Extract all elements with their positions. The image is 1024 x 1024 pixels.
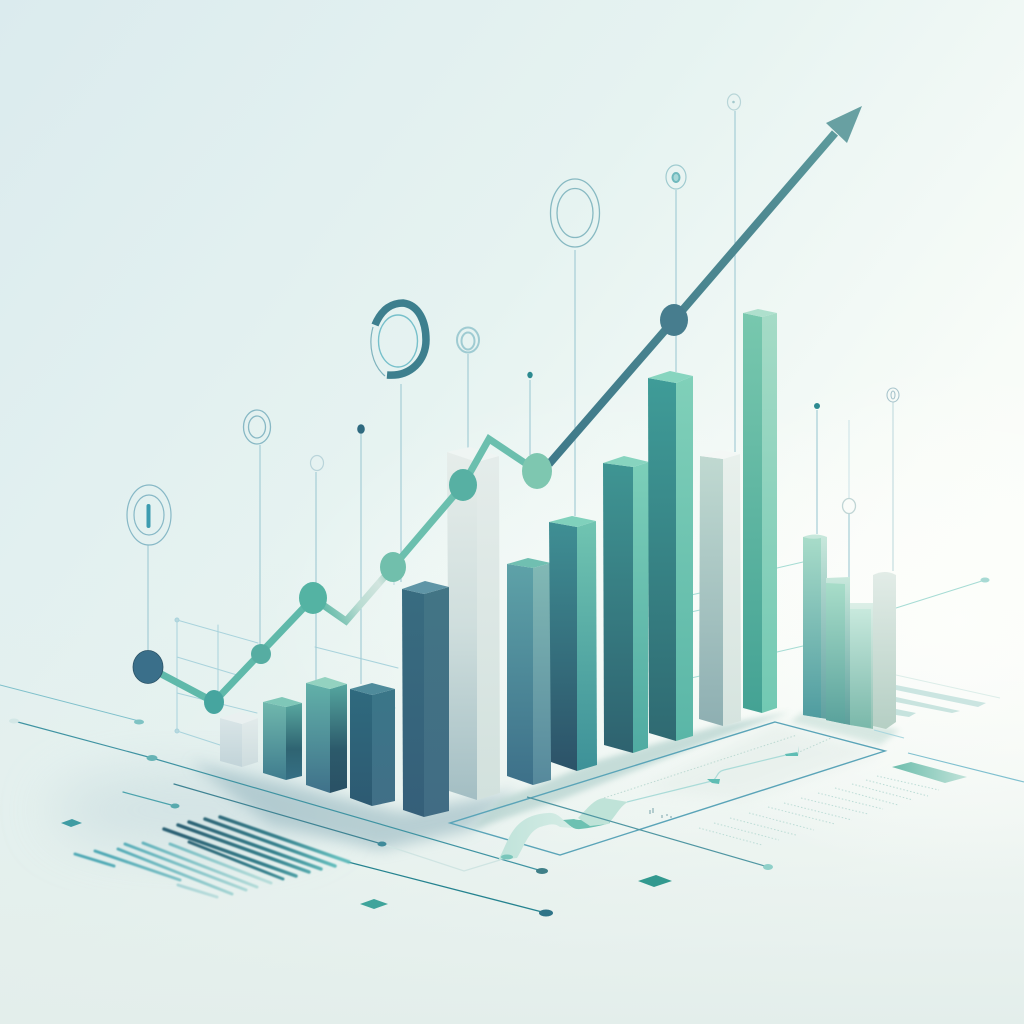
cluster bar 1: [803, 534, 827, 719]
pin icons: [127, 94, 899, 545]
icon: right small ring: [887, 388, 899, 402]
bar 7: [507, 558, 551, 785]
dotted guide lines: [604, 735, 831, 798]
right stripes: [896, 675, 1000, 717]
trend curve with markers: [627, 746, 799, 802]
icon: dark dot: [357, 424, 365, 434]
bar 5: [402, 581, 449, 817]
light stripes: [75, 843, 271, 897]
line: rising teal segments: [148, 439, 537, 702]
icon: large arc ring: [371, 303, 426, 376]
panel: floor frame with ribbon chart: [450, 722, 885, 870]
ribbon curve: [498, 798, 628, 860]
dark stripes: [164, 817, 349, 879]
bar 12: [743, 309, 777, 713]
bar 4: [350, 683, 395, 806]
bar 10: [648, 371, 693, 741]
diamond markers: [61, 819, 672, 909]
diagonal frame line: [527, 797, 773, 870]
bar 6: [447, 447, 500, 800]
cluster bar 2: [826, 577, 850, 725]
cluster bar 3: [850, 603, 873, 729]
floor shadows: [50, 712, 900, 850]
right floor lines: [874, 730, 1024, 782]
line: top-left connector: [0, 685, 144, 724]
icon: small ring: [310, 456, 324, 470]
icon: small teal dot: [527, 372, 533, 378]
line: long floor connector: [9, 718, 548, 874]
bar 1: [220, 712, 258, 767]
cluster bar 4: [873, 572, 896, 729]
left background grid: [175, 618, 398, 745]
tiny glyph marks: [650, 808, 671, 818]
bar 2: [263, 697, 302, 780]
icon: tall double ring: [550, 179, 600, 247]
teal label block: [892, 762, 967, 783]
trend line with arrow: [133, 106, 862, 714]
icon: double ring: [244, 410, 270, 444]
frame outline: [450, 722, 885, 855]
line: lower floor connector: [348, 862, 553, 916]
bar chart: right cluster: [803, 534, 896, 729]
bar 9: [603, 456, 649, 753]
line: middle floor connector: [174, 784, 500, 871]
icon: right teal dot: [814, 403, 820, 409]
bar chart: main bars: [220, 309, 777, 817]
bar 11: [699, 450, 741, 726]
data points: [133, 304, 688, 714]
icon: ring with teal core: [666, 165, 686, 189]
bar 3: [306, 677, 347, 793]
icon: target pin with bar: [127, 485, 171, 545]
icon: right light ring: [842, 498, 856, 514]
icon: faint top ring: [728, 94, 740, 110]
striped data lines: [75, 817, 349, 897]
floor grid and connector lines: [0, 562, 989, 916]
dotted text rows: [699, 776, 939, 845]
pin stems: [148, 111, 893, 684]
right background grid: [691, 562, 989, 678]
line: short left connector: [123, 792, 180, 808]
arrow: dark upper segment: [549, 106, 862, 464]
icon: light double ring: [457, 328, 479, 352]
bar 8: [549, 516, 597, 771]
